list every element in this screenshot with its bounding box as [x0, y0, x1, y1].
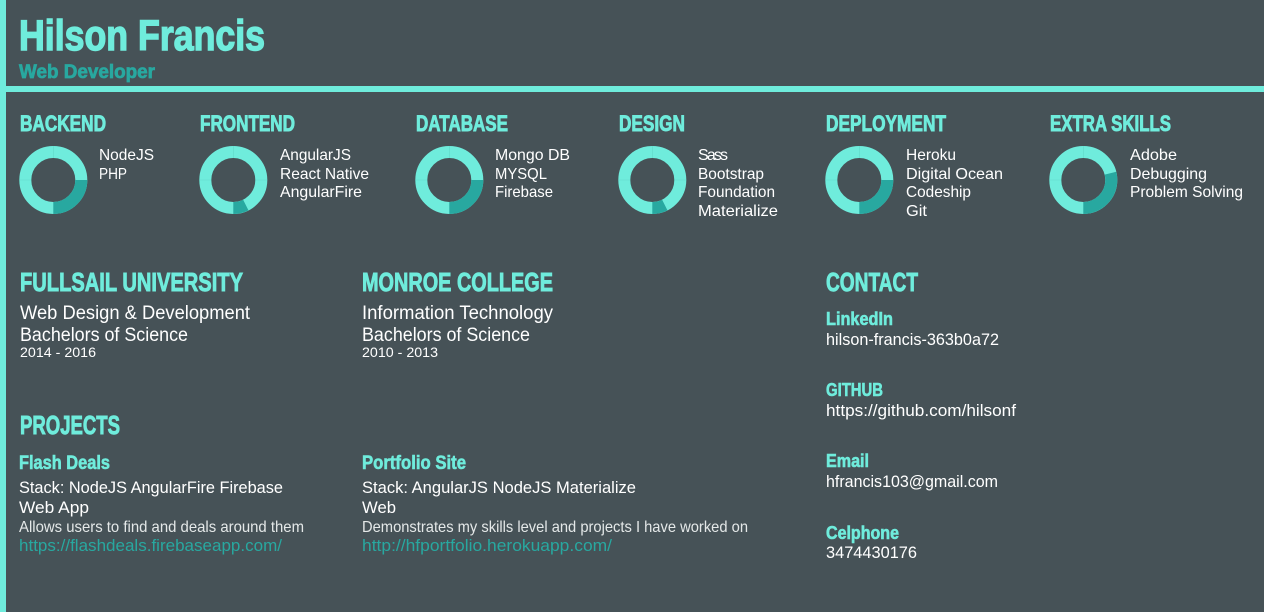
contact item: phone: [826, 523, 917, 562]
subtitle: role: Web Developer: [19, 62, 156, 83]
panel: deployment skills: [825, 111, 1003, 220]
text: Flash Deals details: Web App: [19, 498, 89, 517]
text: Flash Deals details: https://flashdeals.firebaseapp.com/: [19, 536, 282, 555]
list: frontend skills: React Native: [280, 166, 369, 183]
contact item: phone: Celphone: [826, 523, 899, 543]
heading: Fullsail University: FULLSAIL UNIVERSITY: [20, 267, 243, 297]
heading: backend: BACKEND: [20, 111, 106, 136]
list: design skills: Bootstrap: [698, 166, 764, 183]
contact item: phone: 3474430176: [826, 544, 917, 562]
list: design skills: Materialize: [698, 203, 778, 220]
text: Fullsail degree: [20, 303, 251, 360]
text: Portfolio Site details: [362, 478, 748, 555]
contact item: GitHub: https://github.com/hilsonf: [826, 402, 1016, 420]
list: extra skills: [1130, 147, 1243, 201]
donut chart: deployment: [825, 146, 887, 208]
contact item: email: Email: [826, 451, 869, 471]
donut chart: frontend: [199, 146, 267, 208]
text: Flash Deals details: Allows users to find and deals around them: [19, 519, 304, 536]
heading: Monroe College: MONROE COLLEGE: [362, 267, 553, 297]
heading: contact: CONTACT: [826, 267, 918, 297]
contact item: email: hfrancis103@gmail.com: [826, 473, 998, 491]
text: Fullsail degree: Web Design & Development: [20, 303, 251, 324]
project title: Flash Deals: Flash Deals: [19, 453, 110, 474]
title: name: Hilson Francis: [19, 12, 265, 60]
heading: extra skills: EXTRA SKILLS: [1050, 111, 1171, 136]
contact item: GitHub: [826, 380, 1016, 420]
panel: backend skills: [19, 111, 154, 208]
panel: project Portfolio Site: [362, 453, 748, 555]
list: backend skills: NodeJS: [99, 147, 154, 164]
list: frontend skills: AngularFire: [280, 184, 362, 201]
panel: database skills: [415, 111, 570, 208]
panel: design skills: [618, 111, 778, 220]
list: backend skills: PHP: [99, 166, 127, 183]
list: database skills: MYSQL: [495, 166, 547, 183]
text: Portfolio Site details: Demonstrates my skills level and projects I have worked on: [362, 519, 748, 536]
panel: education Fullsail: [20, 267, 251, 360]
heading: design: DESIGN: [619, 111, 685, 136]
list: database skills: Mongo DB: [495, 147, 570, 164]
heading: frontend: FRONTEND: [200, 111, 295, 136]
heading: projects: PROJECTS: [20, 410, 120, 440]
panel: education Monroe: [362, 267, 553, 360]
donut chart: database: [415, 146, 477, 208]
header: name and role: [19, 12, 265, 83]
donut chart: design: [618, 146, 686, 208]
list: design skills: Sass: [698, 147, 728, 164]
list: design skills: [698, 147, 778, 220]
text: Portfolio Site details: http://hfportfolio.herokuapp.com/: [362, 536, 612, 555]
heading: deployment: DEPLOYMENT: [826, 111, 946, 136]
panel: project Flash Deals: [19, 453, 304, 555]
contact item: LinkedIn: hilson-francis-363b0a72: [826, 331, 999, 349]
text: Fullsail degree: 2014 - 2016: [20, 344, 96, 360]
project title: Portfolio Site: Portfolio Site: [362, 453, 466, 474]
text: Flash Deals details: [19, 478, 304, 555]
panel: contact: [826, 267, 1016, 562]
left accent bar: [0, 0, 6, 612]
text: Monroe degree: Information Technology: [362, 303, 553, 324]
donut chart: extra skills: [1049, 146, 1111, 208]
list: database skills: Firebase: [495, 184, 553, 201]
list: extra skills: Debugging: [1130, 166, 1207, 183]
text: Portfolio Site details: Web: [362, 498, 396, 517]
list: design skills: Foundation: [698, 184, 775, 201]
contact item: LinkedIn: LinkedIn: [826, 309, 893, 329]
list: deployment skills: Heroku: [906, 147, 956, 164]
list: extra skills: Adobe: [1130, 147, 1177, 164]
list: deployment skills: Codeship: [906, 184, 971, 201]
list: frontend skills: AngularJS: [280, 147, 351, 164]
list: deployment skills: Git: [906, 203, 928, 220]
contact item: LinkedIn: [826, 309, 999, 349]
donut chart: backend: [19, 146, 81, 208]
header divider bar: [6, 86, 1264, 92]
list: frontend skills: [280, 147, 369, 201]
text: Monroe degree: Bachelors of Science: [362, 325, 530, 346]
panel: extra skills: [1049, 111, 1243, 208]
text: Monroe degree: 2010 - 2013: [362, 344, 438, 360]
list: extra skills: Problem Solving: [1130, 184, 1243, 201]
list: deployment skills: [906, 147, 1003, 220]
text: Flash Deals details: Stack: NodeJS AngularFire Firebase: [19, 478, 283, 497]
list: database skills: [495, 147, 570, 201]
contact item: GitHub: GITHUB: [826, 380, 883, 400]
heading: database: DATABASE: [416, 111, 508, 136]
list: backend skills: [99, 147, 154, 183]
text: Fullsail degree: Bachelors of Science: [20, 325, 188, 346]
list: deployment skills: Digital Ocean: [906, 166, 1003, 183]
panel: frontend skills: [199, 111, 369, 208]
text: Monroe degree: [362, 303, 553, 360]
contact item: email: [826, 451, 998, 491]
text: Portfolio Site details: Stack: AngularJS NodeJS Materialize: [362, 478, 636, 497]
